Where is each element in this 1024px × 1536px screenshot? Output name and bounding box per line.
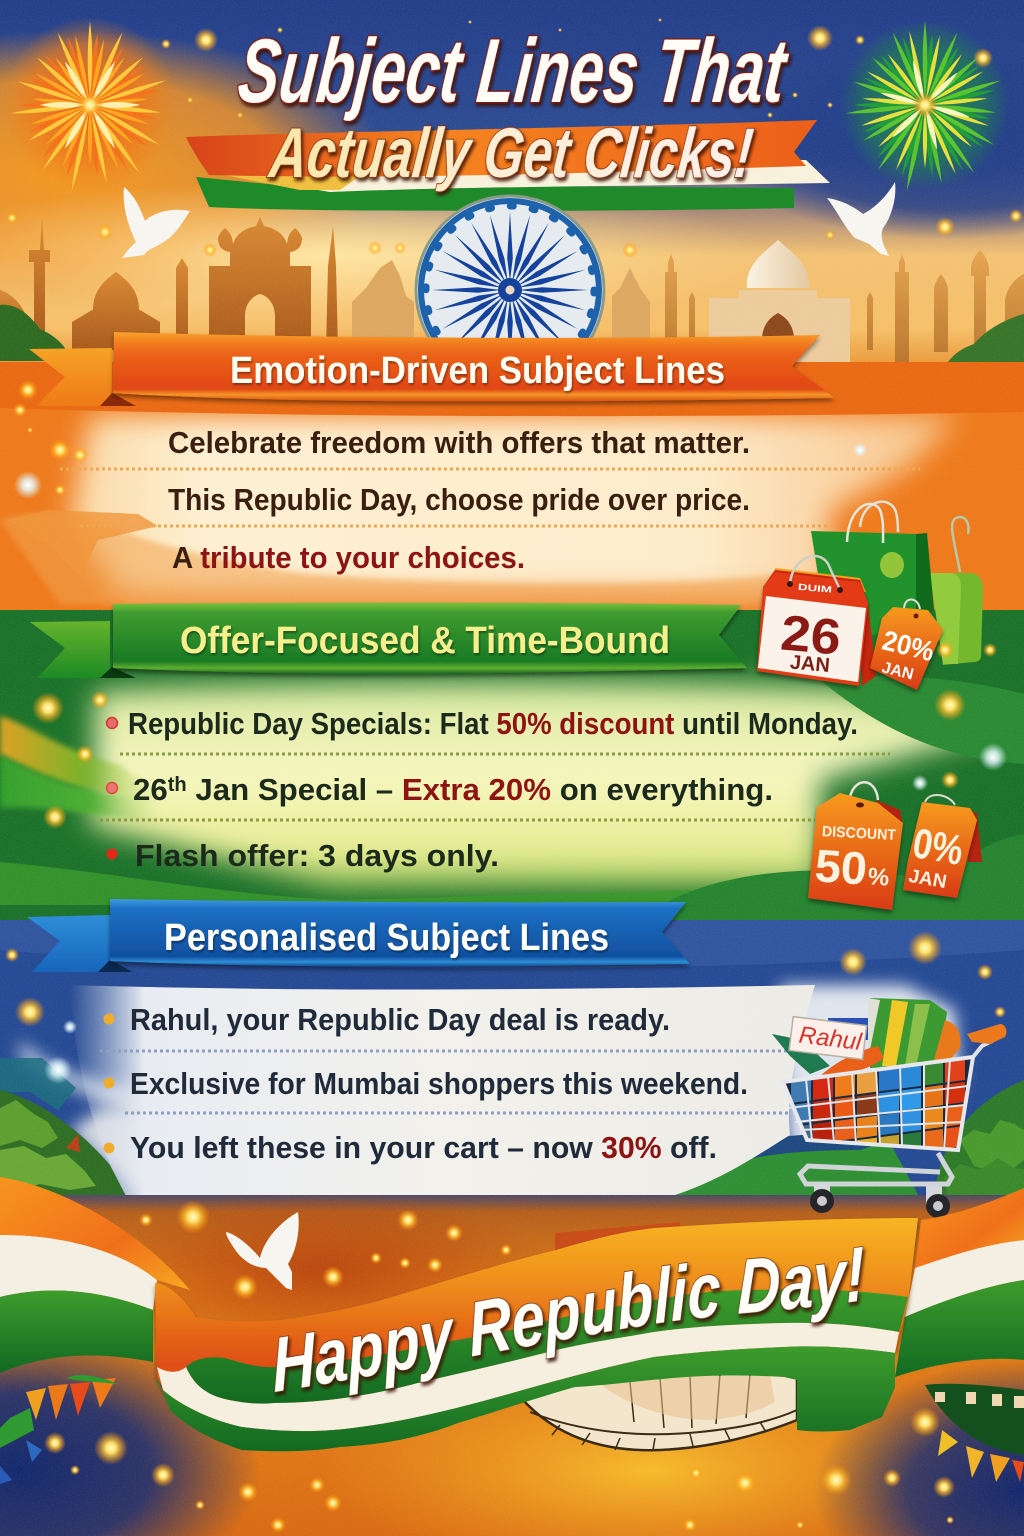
text block: offer lines: 26 <box>133 772 167 807</box>
sparkles: sky <box>6 18 1023 258</box>
heading: Personalised Subject Lines <box>164 917 609 959</box>
icon: lime bag <box>930 517 983 665</box>
bunting: right <box>925 1384 1024 1482</box>
sparkles: lower panels <box>5 380 1006 1533</box>
heading: Offer-Focused & Time-Bound <box>180 620 670 662</box>
icon: discount 50% tag <box>808 782 903 910</box>
happy republic day ribbon <box>152 1218 921 1452</box>
text block: emotion lines <box>60 425 920 575</box>
banner: offer-focused <box>30 603 747 678</box>
name tag: Rahul <box>797 1022 864 1056</box>
text block: offer lines: Jan Special – <box>187 772 402 807</box>
icon: 20% tag: JAN <box>880 659 915 684</box>
greeting: Happy Republic Day! <box>274 1246 868 1402</box>
skyline: Taj Mahal <box>665 240 1024 362</box>
icon: calendar 26 Jan: JAN <box>789 652 831 677</box>
heading: Emotion-Driven Subject Lines <box>230 350 725 392</box>
text block: offer lines: Republic Day Specials: Flat 50% discount until Monday. <box>128 706 858 741</box>
bunting: left <box>0 1375 118 1484</box>
skyline: centre monuments <box>352 260 650 350</box>
icon: discount 50% tag: 50 <box>813 839 869 895</box>
icon: green bag <box>811 502 934 650</box>
section band: orange <box>0 362 1024 612</box>
text block: emotion lines: This Republic Day, choose pride over price. <box>168 482 750 517</box>
bush: left of panel <box>0 1090 126 1196</box>
title: Subject Lines That <box>234 21 793 122</box>
firework: green <box>845 21 1002 192</box>
text block: offer lines: Extra 20% on everything. <box>402 772 772 807</box>
text block: personalised lines: Rahul, your Republic Day deal is ready. <box>130 1002 670 1037</box>
background: sky <box>0 0 1024 365</box>
text block: offer lines: th <box>168 774 187 796</box>
icon: discount 50% tag: % <box>867 863 890 892</box>
subtitle: Actually Get Clicks! <box>265 113 757 192</box>
icon: Ashoka chakra <box>416 196 604 384</box>
dove: bottom <box>226 1212 299 1290</box>
icon: 0% Jan tag: 0% <box>909 819 967 874</box>
icon: 0% Jan tag: JAN <box>907 866 948 893</box>
icon: 20% tag <box>870 599 943 690</box>
skyline: left monuments <box>0 217 338 350</box>
icon: discount 50% tag: DISCOUNT <box>822 823 896 844</box>
flag ribbon: right <box>895 1188 1024 1377</box>
bush: right of cart <box>935 1080 1024 1196</box>
section band: bottom <box>0 1195 1024 1536</box>
name tag <box>789 1017 867 1059</box>
title ribbon <box>186 113 830 211</box>
banner: personalised <box>27 899 690 972</box>
text block: offer lines: Flash offer: 3 days only. <box>135 838 499 873</box>
icon: 0% Jan tag <box>903 795 982 898</box>
section band: green <box>0 610 1024 920</box>
section band: blue <box>0 920 1024 1199</box>
icon: calendar 26 Jan <box>757 556 876 686</box>
icon: shopping cart <box>772 998 1006 1218</box>
icon: 20% tag: 20% <box>879 624 937 667</box>
text block: emotion lines: Celebrate freedom with offers that matter. <box>168 425 750 460</box>
banner: emotion-driven <box>29 332 835 406</box>
lotus fan <box>523 1370 797 1450</box>
icon: calendar 26 Jan: DUIM <box>798 582 832 595</box>
firework: orange <box>10 21 167 192</box>
dove: top right <box>827 182 895 256</box>
flag ribbon: left <box>0 1177 190 1373</box>
icon: calendar 26 Jan: 26 <box>778 605 843 666</box>
bushes <box>0 305 1024 362</box>
text block: emotion lines: A tribute to your choices. <box>172 540 525 575</box>
dove: top left <box>122 187 190 258</box>
text block: personalised lines: Exclusive for Mumbai shoppers this weekend. <box>130 1066 748 1101</box>
sparkles: cool glints <box>14 443 1007 1084</box>
text block: personalised lines <box>100 1002 790 1165</box>
text block: personalised lines: You left these in your cart – now 30% off. <box>130 1130 717 1165</box>
text block: offer lines <box>100 706 890 873</box>
